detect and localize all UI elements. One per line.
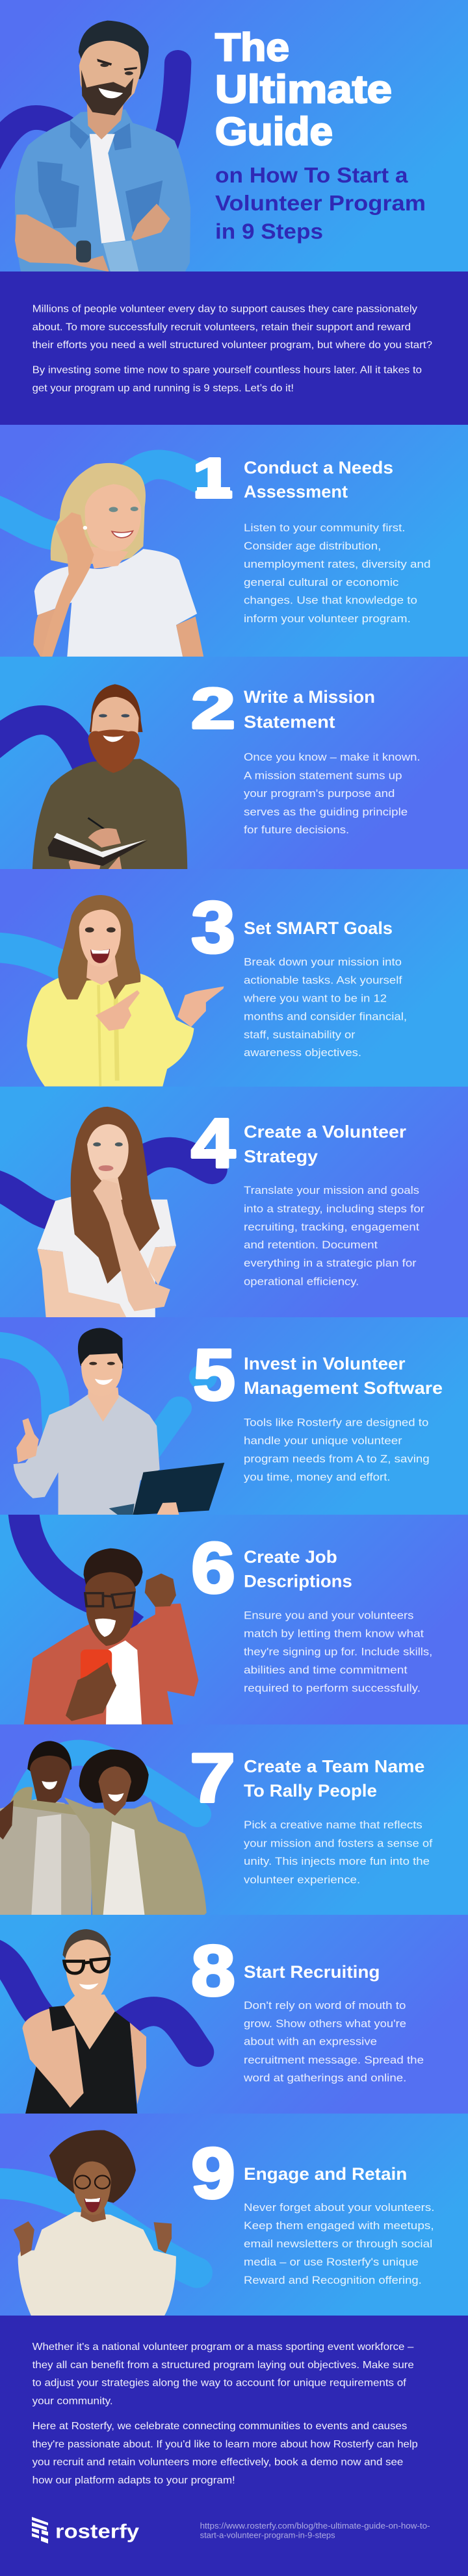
text block: operational efficiency. bbox=[244, 1276, 359, 1287]
logo: rosterfy bbox=[32, 2517, 140, 2544]
text block: Consider age distribution, bbox=[244, 540, 381, 552]
text block: closing paragraphs: they're passionate about. If you'd like to learn more about how Rosterfy can help bbox=[32, 2439, 418, 2450]
heading: Management Software bbox=[244, 1378, 443, 1398]
heading: Start Recruiting bbox=[244, 1962, 380, 1982]
text block bbox=[243, 1999, 424, 2084]
person: excited man with phone bbox=[24, 1548, 198, 1724]
person: cheering woman in sweater bbox=[14, 2130, 176, 2316]
heading: Conduct a Needs bbox=[244, 458, 393, 477]
heading: Assessment bbox=[244, 482, 348, 501]
heading: Descriptions bbox=[244, 1572, 352, 1591]
text block: your program's purpose and bbox=[244, 787, 395, 800]
text block: Never forget about your volunteers. bbox=[244, 2201, 434, 2214]
person: two laughing men bbox=[0, 1741, 207, 1916]
text block: A mission statement sums up bbox=[244, 769, 402, 781]
text block: your mission and fosters a sense of bbox=[244, 1837, 433, 1849]
text block: Listen to your community first. bbox=[244, 522, 406, 534]
number 6: 6 bbox=[191, 1528, 235, 1608]
panel: step 3 bbox=[0, 869, 468, 1087]
text block: Pick a creative name that reflects bbox=[244, 1819, 422, 1831]
person: woman reaching out bbox=[22, 1929, 146, 2114]
text block: required to perform successfully. bbox=[244, 1682, 421, 1694]
title: Ultimate bbox=[215, 68, 392, 111]
subtitle: Volunteer Program bbox=[215, 191, 426, 215]
text block: recruiting, tracking, engagement bbox=[244, 1221, 419, 1233]
text block: months and consider financial, bbox=[244, 1010, 407, 1022]
text block: intro paragraphs: about. To more successfully recruit volunteers, retain their support and reward bbox=[32, 322, 411, 333]
text block bbox=[244, 1184, 425, 1287]
text block: actionable tasks. Ask yourself bbox=[244, 974, 402, 987]
subtitle: on How To Start a bbox=[215, 163, 408, 187]
panel: step 7 bbox=[0, 1724, 468, 1915]
number 1: 1 bbox=[192, 447, 233, 510]
text block: inform your volunteer program. bbox=[244, 612, 411, 625]
heading bbox=[244, 1756, 424, 1800]
decorative wave bbox=[0, 62, 178, 178]
text block: general cultural or economic bbox=[244, 576, 398, 588]
heading: Create Job bbox=[244, 1547, 337, 1567]
text block: about with an expressive bbox=[244, 2036, 377, 2048]
text block: closing paragraphs: you recruit and retain volunteers more effectively, book a demo now and see bbox=[32, 2457, 403, 2468]
text block: closing paragraphs: your community. bbox=[32, 2396, 113, 2407]
text block: closing paragraphs: how our platform adapts to your program! bbox=[32, 2475, 235, 2486]
heading: Engage and Retain bbox=[244, 2164, 407, 2184]
text block: Ensure you and your volunteers bbox=[244, 1609, 413, 1621]
text block: for future decisions. bbox=[244, 824, 349, 836]
panel: step 1 bbox=[0, 425, 468, 657]
text block bbox=[244, 1609, 432, 1694]
text block bbox=[244, 1819, 433, 1886]
text block: intro paragraphs: their efforts you need a well structured volunteer program, but where do you start? bbox=[32, 340, 432, 351]
text block: word at gatherings and online. bbox=[243, 2072, 406, 2084]
heading: To Rally People bbox=[244, 1781, 377, 1800]
text block bbox=[244, 2201, 434, 2286]
panel: step 6 bbox=[0, 1515, 468, 1724]
text block: Break down your mission into bbox=[244, 956, 402, 968]
text block: volunteer experience. bbox=[244, 1873, 360, 1886]
heading: Create a Volunteer bbox=[244, 1122, 407, 1142]
text block: Reward and Recognition offering. bbox=[244, 2274, 422, 2286]
text block: Once you know – make it known. bbox=[244, 751, 420, 763]
source url bbox=[200, 2521, 430, 2540]
number 5: 5 bbox=[193, 1335, 235, 1415]
number 9: 9 bbox=[191, 2134, 235, 2214]
text block bbox=[244, 522, 430, 625]
text block: email newsletters or through social bbox=[244, 2238, 432, 2250]
text block: Don't rely on word of mouth to bbox=[244, 1999, 406, 2012]
text block: serves as the guiding principle bbox=[244, 805, 408, 818]
text block: unity. This injects more fun into the bbox=[244, 1855, 430, 1867]
person: woman listening bbox=[33, 463, 203, 657]
text block: into a strategy, including steps for bbox=[244, 1202, 425, 1215]
heading: Write a Mission bbox=[244, 687, 375, 707]
heading: Invest in Volunteer bbox=[244, 1354, 406, 1373]
person: woman in yellow hoodie bbox=[27, 895, 224, 1087]
number 3: 3 bbox=[191, 887, 235, 968]
panel: footer bbox=[0, 2316, 468, 2576]
panel: step 2 bbox=[0, 657, 468, 869]
text block: staff, sustainability or bbox=[244, 1029, 356, 1041]
text block: closing paragraphs: to adjust your strategies along the way to account for unique requirements of bbox=[32, 2378, 406, 2389]
number 8: 8 bbox=[191, 1931, 235, 2011]
number 2: 2 bbox=[191, 676, 235, 740]
person: bearded man with notebook bbox=[32, 684, 187, 873]
panel: step 8 bbox=[0, 1915, 468, 2114]
text block: Translate your mission and goals bbox=[244, 1184, 419, 1196]
text block bbox=[243, 956, 407, 1059]
text block bbox=[244, 751, 420, 836]
text block: intro paragraphs: Millions of people volunteer every day to support causes they care passionately bbox=[32, 304, 417, 315]
source url: start-a-volunteer-program-in-9-steps bbox=[200, 2531, 335, 2540]
person: man with laptop bbox=[14, 1328, 224, 1515]
number 7: 7 bbox=[190, 1739, 235, 1817]
text block: intro paragraphs bbox=[32, 304, 432, 394]
heading: Set SMART Goals bbox=[244, 918, 393, 938]
text block: closing paragraphs: they all can benefit from a structured program laying out objectives. Make sure bbox=[32, 2360, 414, 2371]
heading bbox=[244, 1122, 407, 1167]
text block: abilities and time commitment bbox=[244, 1664, 408, 1676]
text block: Keep them engaged with meetups, bbox=[244, 2219, 434, 2232]
heading bbox=[244, 687, 375, 731]
person: thoughtful woman bbox=[37, 1107, 176, 1321]
person: man in denim jacket bbox=[15, 21, 190, 271]
text block: handle your unique volunteer bbox=[244, 1434, 402, 1446]
text block: Tools like Rosterfy are designed to bbox=[244, 1417, 428, 1429]
text block: intro paragraphs: get your program up and running is 9 steps. Let’s do it! bbox=[32, 383, 294, 394]
text block: closing paragraphs bbox=[32, 2342, 418, 2486]
text block: awareness objectives. bbox=[244, 1046, 361, 1059]
panel: hero bbox=[0, 0, 468, 271]
subtitle bbox=[215, 163, 426, 243]
heading: Strategy bbox=[244, 1147, 318, 1167]
text block: you time, money and effort. bbox=[244, 1471, 391, 1483]
heading bbox=[244, 1354, 443, 1398]
heading: Statement bbox=[244, 712, 335, 731]
title bbox=[215, 25, 392, 153]
heading bbox=[244, 1547, 352, 1591]
text block: intro paragraphs: By investing some time now to spare yourself countless hours later. All it takes to bbox=[32, 365, 422, 375]
text block: they're signing up for. Include skills, bbox=[244, 1645, 432, 1658]
text block: changes. Use that knowledge to bbox=[244, 594, 417, 607]
text block: match by letting them know what bbox=[244, 1628, 424, 1639]
text block: recruitment message. Spread the bbox=[244, 2054, 424, 2066]
title: The bbox=[215, 25, 289, 69]
subtitle: in 9 Steps bbox=[215, 220, 323, 243]
heading bbox=[244, 458, 393, 501]
panel: introduction bbox=[0, 271, 468, 425]
heading: Create a Team Name bbox=[244, 1756, 424, 1776]
text block: closing paragraphs: Here at Rosterfy, we celebrate connecting communities to events and causes bbox=[32, 2421, 407, 2432]
text block: closing paragraphs: Whether it's a national volunteer program or a mass sporting event workforce – bbox=[32, 2342, 414, 2353]
text block: unemployment rates, diversity and bbox=[244, 558, 430, 570]
text block: grow. Show others what you're bbox=[244, 2017, 406, 2030]
text block: and retention. Document bbox=[244, 1239, 378, 1251]
text block bbox=[244, 1417, 430, 1483]
source url: https://www.rosterfy.com/blog/the-ultimate-guide-on-how-to- bbox=[200, 2521, 430, 2531]
title: Guide bbox=[215, 110, 333, 153]
panel: step 9 bbox=[0, 2114, 468, 2316]
text block: where you want to be in 12 bbox=[243, 992, 387, 1004]
panel: step 4 bbox=[0, 1087, 468, 1317]
text block: media – or use Rosterfy's unique bbox=[244, 2256, 419, 2268]
text block: program needs from A to Z, saving bbox=[244, 1453, 430, 1465]
text block: everything in a strategic plan for bbox=[244, 1257, 417, 1269]
logo: rosterfy: rosterfy bbox=[55, 2520, 140, 2543]
panel: step 5 bbox=[0, 1317, 468, 1515]
number 4: 4 bbox=[191, 1104, 235, 1182]
